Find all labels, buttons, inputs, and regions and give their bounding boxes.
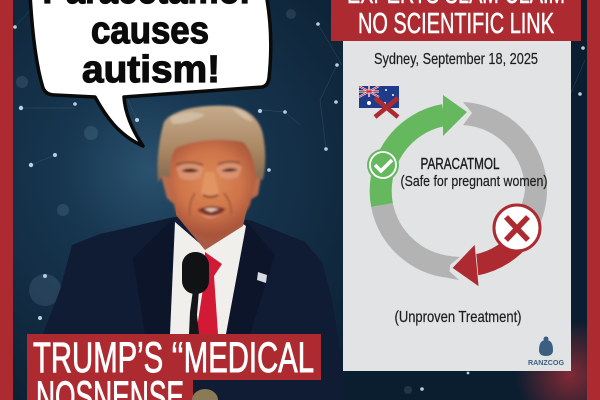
center label: PARACATMOL — [420, 156, 500, 173]
cheek creases — [190, 193, 231, 216]
nose — [201, 172, 219, 196]
right red frame — [587, 0, 600, 400]
suit — [27, 217, 345, 400]
hair — [157, 106, 265, 182]
green arrow — [381, 95, 467, 205]
flag pin — [257, 272, 267, 283]
tie — [196, 252, 222, 334]
red arrow — [452, 233, 525, 287]
panel: expert response — [331, 0, 581, 371]
icon: check badge — [367, 149, 399, 181]
dateline: Sydney, September 18, 2025 — [374, 51, 538, 68]
cycle diagram — [367, 95, 547, 287]
Trump figure — [27, 106, 345, 400]
mouth — [197, 206, 226, 216]
eyes and brows — [181, 168, 238, 172]
bubble text — [42, 0, 250, 91]
title banner — [27, 334, 321, 400]
speech bubble — [30, 0, 271, 146]
bubble text: causes — [91, 10, 209, 52]
microphone — [182, 252, 209, 334]
headline banner — [331, 0, 581, 41]
hair highlights — [170, 108, 253, 124]
shirt — [170, 222, 246, 334]
gray arc lower left — [382, 205, 450, 267]
icon: crossed Australian flag — [359, 86, 399, 117]
treatment label: (Unproven Treatment) — [394, 309, 522, 326]
ears — [160, 172, 262, 205]
center label: (Safe for pregnant women) — [400, 173, 548, 190]
icon: cross badge — [494, 205, 540, 251]
neck — [176, 195, 250, 250]
bubble text: autism! — [82, 49, 220, 91]
center label — [400, 156, 548, 190]
left red frame — [0, 0, 13, 400]
logo: RANZCOG — [528, 336, 565, 367]
logo: RANZCOG: RANZCOG — [528, 360, 565, 367]
face — [167, 125, 258, 241]
gray arc upper right — [463, 102, 547, 232]
title banner: TRUMP’S ‘‘MEDICAL — [33, 334, 314, 382]
eye sockets — [176, 163, 242, 180]
